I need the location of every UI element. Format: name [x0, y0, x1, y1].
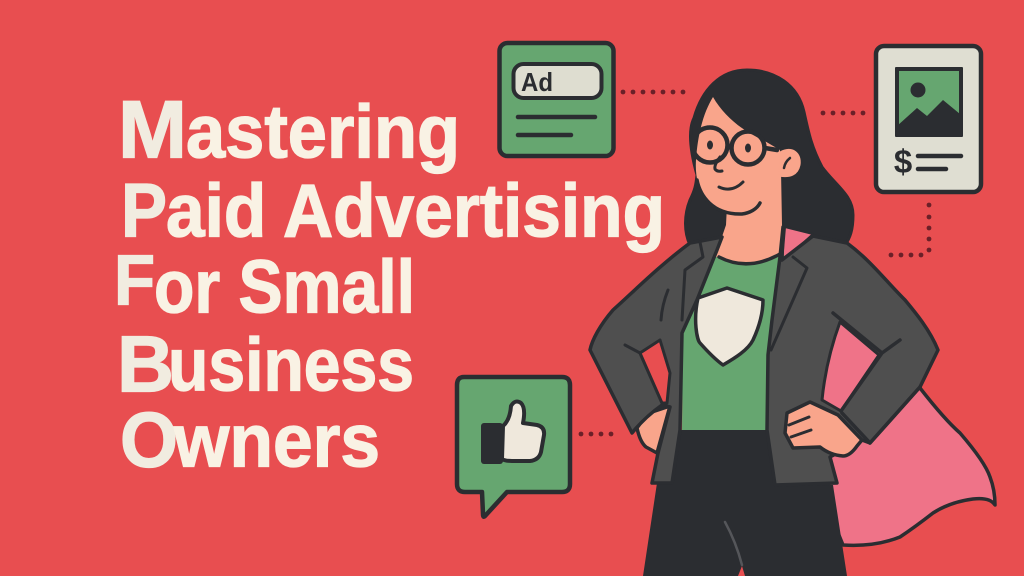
thumbs up icon — [481, 402, 544, 464]
price lines — [918, 156, 961, 169]
shirt — [682, 254, 790, 431]
dotted connectors — [579, 90, 931, 436]
neck — [710, 170, 790, 272]
face — [696, 97, 781, 214]
pink gap under arm — [822, 322, 879, 411]
eyes — [707, 140, 751, 152]
shield — [696, 288, 763, 365]
cape collar — [782, 227, 813, 262]
jacket left — [590, 237, 722, 483]
card: text ad — [500, 43, 614, 156]
ad copy lines — [518, 117, 595, 135]
jaw line — [697, 180, 760, 214]
title — [114, 84, 665, 484]
nose and mouth — [715, 157, 743, 189]
hair — [686, 70, 853, 245]
title: astering — [186, 90, 460, 174]
title: M — [118, 84, 187, 176]
title: B — [117, 320, 174, 408]
ear — [779, 149, 800, 177]
title: aid Advertising — [166, 168, 665, 252]
jacket right — [767, 227, 938, 485]
pants — [643, 430, 847, 576]
title: or Small — [154, 244, 415, 328]
card: image ad with price — [876, 46, 981, 192]
title: usiness — [168, 322, 414, 406]
dollar sign: $ — [894, 143, 912, 180]
glasses — [692, 128, 777, 164]
character: superhero business woman — [590, 70, 995, 576]
title: wners — [173, 398, 380, 482]
picture icon — [895, 67, 963, 137]
right hand — [785, 402, 862, 456]
title: P — [121, 168, 167, 254]
cape — [800, 300, 995, 545]
title: O — [120, 396, 178, 484]
ad label box: Ad — [521, 67, 553, 97]
title: F — [114, 242, 155, 320]
left hand — [637, 406, 670, 453]
card: thumbs up speech bubble — [457, 377, 570, 517]
